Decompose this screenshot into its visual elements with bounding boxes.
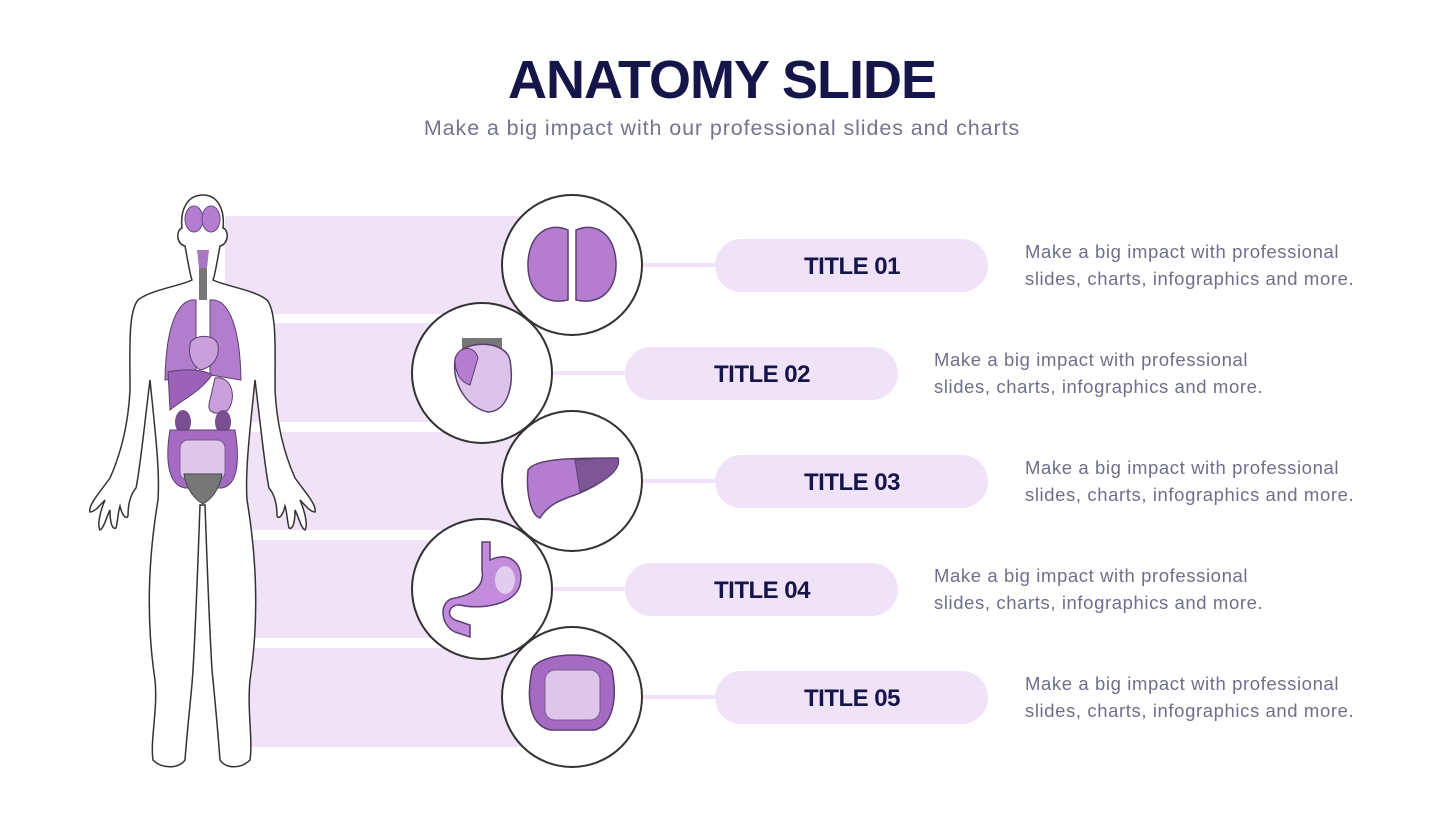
circle: heart bbox=[412, 303, 552, 443]
descriptions: slides, charts, infographics and more. bbox=[934, 376, 1263, 397]
subtitle: Make a big impact with our professional slides and charts bbox=[424, 116, 1020, 140]
pill titles: TITLE 03 bbox=[804, 469, 900, 496]
descriptions: slides, charts, infographics and more. bbox=[934, 592, 1263, 613]
connectors bbox=[550, 265, 716, 697]
descriptions: Make a big impact with professional bbox=[934, 349, 1248, 370]
circle: brain bbox=[502, 195, 642, 335]
circle: stomach bbox=[412, 519, 552, 659]
descriptions bbox=[934, 241, 1354, 721]
liver & stomach bbox=[168, 370, 212, 410]
pill titles: TITLE 01 bbox=[804, 253, 900, 280]
pill titles: TITLE 05 bbox=[804, 685, 900, 712]
descriptions: Make a big impact with professional bbox=[1025, 457, 1339, 478]
circle: liver bbox=[502, 411, 642, 551]
human body figure bbox=[90, 195, 315, 767]
descriptions: Make a big impact with professional bbox=[1025, 241, 1339, 262]
trachea bbox=[199, 250, 207, 300]
kidneys and intestines bbox=[175, 410, 191, 434]
pills bbox=[625, 239, 988, 724]
pill titles: TITLE 04 bbox=[714, 577, 811, 604]
pill titles bbox=[714, 253, 900, 712]
title: ANATOMY SLIDE bbox=[508, 50, 936, 110]
pill titles: TITLE 02 bbox=[714, 361, 810, 388]
descriptions: slides, charts, infographics and more. bbox=[1025, 268, 1354, 289]
heart bbox=[189, 336, 218, 370]
descriptions: slides, charts, infographics and more. bbox=[1025, 700, 1354, 721]
descriptions: Make a big impact with professional bbox=[934, 565, 1248, 586]
descriptions: slides, charts, infographics and more. bbox=[1025, 484, 1354, 505]
circle: intestines bbox=[502, 627, 642, 767]
descriptions: Make a big impact with professional bbox=[1025, 673, 1339, 694]
brain in head bbox=[185, 206, 203, 232]
bladder bbox=[184, 474, 222, 504]
background bands bbox=[225, 216, 575, 747]
lungs bbox=[165, 300, 196, 380]
